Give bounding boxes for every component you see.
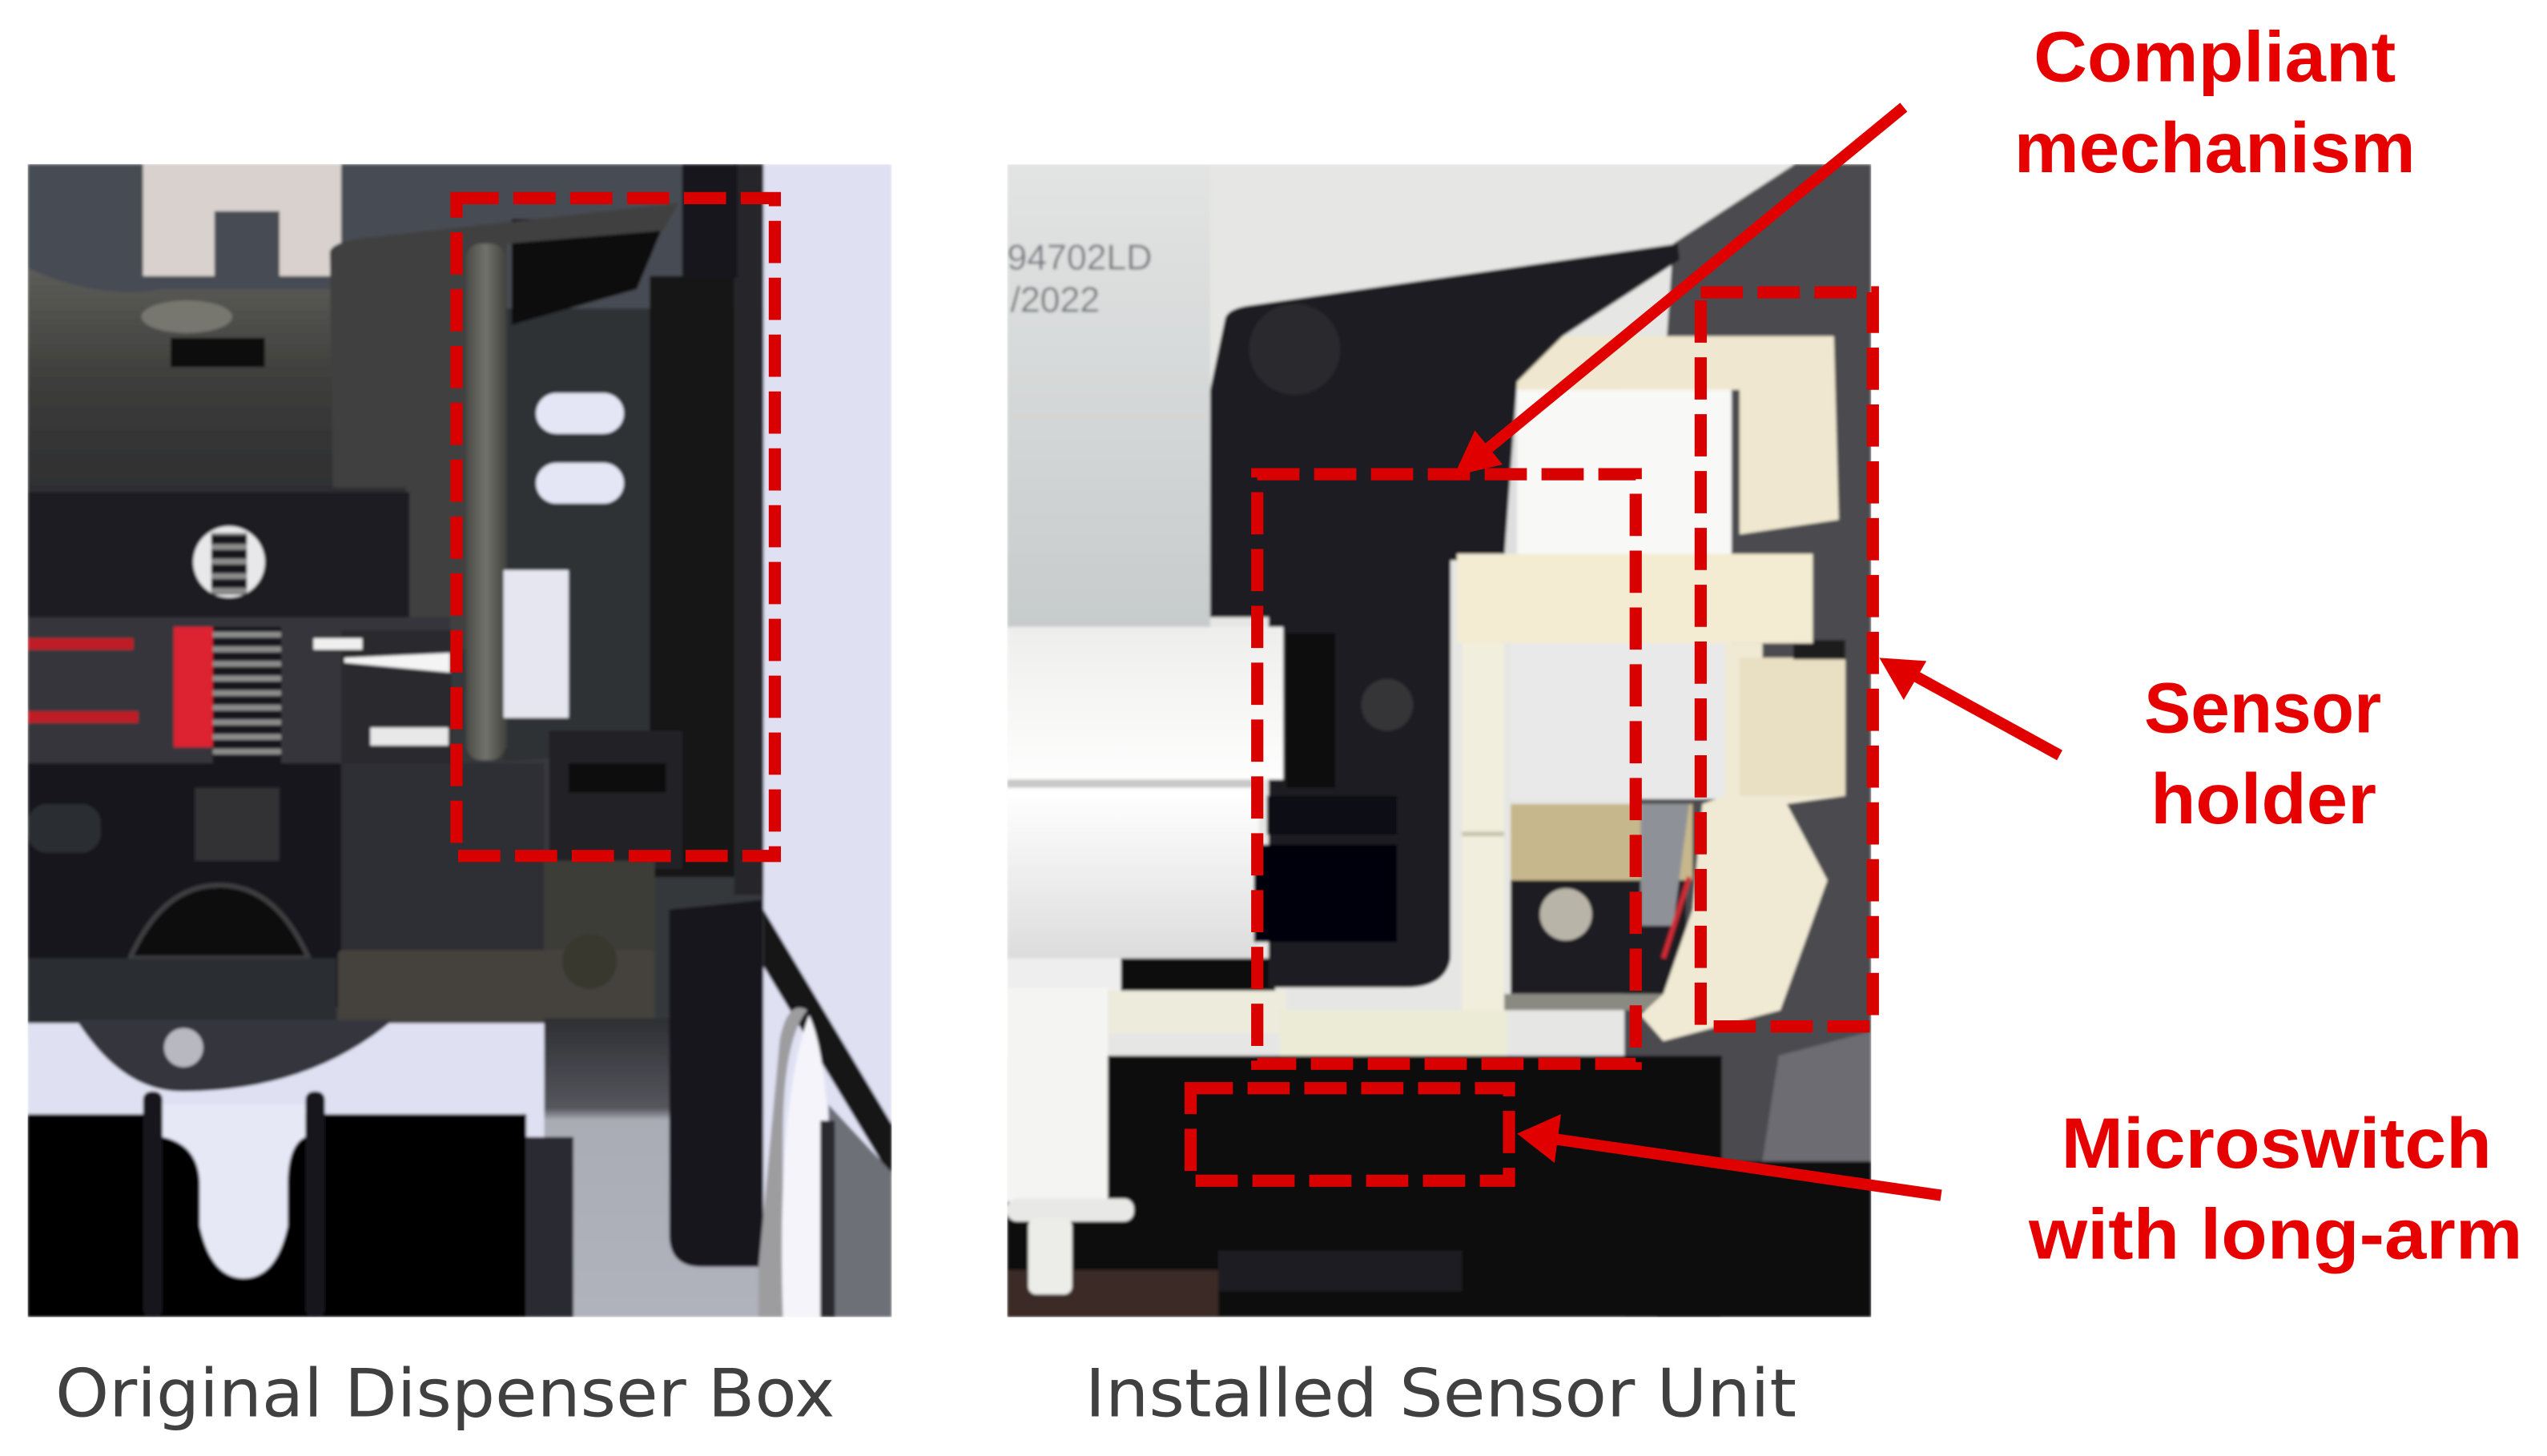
highlight: compliant mechanism dashed box	[1257, 474, 1636, 1064]
highlight: sensor holder dashed box	[1700, 292, 1873, 1027]
arrow: compliant mechanism	[1454, 107, 1904, 476]
label: sensor holder	[2144, 668, 2381, 839]
label: compliant mechanism: Compliant	[2034, 16, 2396, 96]
label: microswitch with long-arm: Microswitch	[2062, 1103, 2492, 1183]
label: compliant mechanism	[2014, 16, 2416, 187]
label: microswitch with long-arm	[2028, 1103, 2522, 1274]
photo: installed sensor unit: /2022	[1010, 280, 1100, 320]
label: sensor holder: holder	[2151, 758, 2376, 839]
highlight: microswitch dashed box	[1191, 1088, 1509, 1180]
caption: original dispenser box: Original Dispenser Box	[55, 1354, 835, 1432]
arrow: sensor holder	[1879, 658, 2060, 755]
label: sensor holder: Sensor	[2144, 668, 2381, 748]
bottle print text: 94702LD	[1007, 239, 1152, 278]
highlight: dashed box on original dispenser	[457, 198, 775, 856]
arrow: microswitch	[1517, 1114, 1941, 1196]
caption: installed sensor unit: Installed Sensor Unit	[1085, 1354, 1797, 1432]
photo: original dispenser box	[28, 164, 891, 1317]
label: microswitch with long-arm: with long-arm	[2028, 1194, 2522, 1274]
photo: installed sensor unit	[1007, 164, 1871, 1317]
label: compliant mechanism: mechanism	[2014, 107, 2416, 187]
